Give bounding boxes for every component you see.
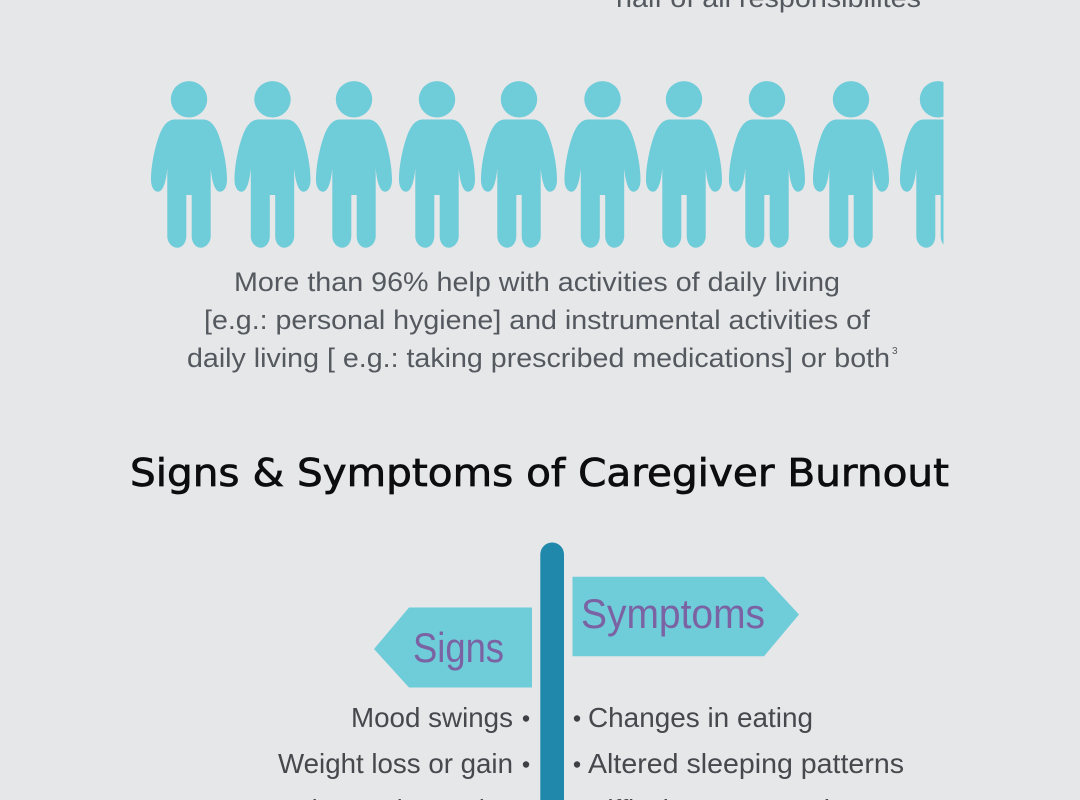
sign: signs arrow pointing left: Signs bbox=[413, 624, 504, 671]
sign: symptoms arrow pointing right bbox=[572, 577, 799, 656]
text block: daily living statistic: [e.g.: personal hygiene] and instrumental activities of bbox=[204, 305, 871, 335]
list: signs: Weight loss or gain bbox=[278, 748, 513, 779]
post bbox=[540, 542, 564, 800]
text block: daily living statistic: More than 96% help with activities of daily living bbox=[234, 267, 840, 297]
sign: symptoms arrow pointing right: Symptoms bbox=[581, 590, 765, 637]
text block: daily living statistic: 3 bbox=[892, 346, 898, 357]
sign: signs arrow pointing left bbox=[374, 608, 532, 688]
icon row: people pictogram bbox=[151, 81, 976, 248]
list: symptoms: Changes in eating bbox=[588, 702, 813, 733]
signpost bbox=[374, 542, 799, 800]
list: symptoms bbox=[574, 702, 904, 800]
list: signs bbox=[268, 702, 529, 800]
list: signs: Mood swings bbox=[351, 702, 513, 733]
text block: daily living statistic: daily living [ e.g.: taking prescribed medications] or both bbox=[187, 343, 890, 373]
list: symptoms: Altered sleeping patterns bbox=[588, 748, 904, 779]
heading: signs and symptoms: Signs & Symptoms of Caregiver Burnout bbox=[130, 451, 949, 495]
text block: daily living statistic bbox=[187, 267, 898, 373]
